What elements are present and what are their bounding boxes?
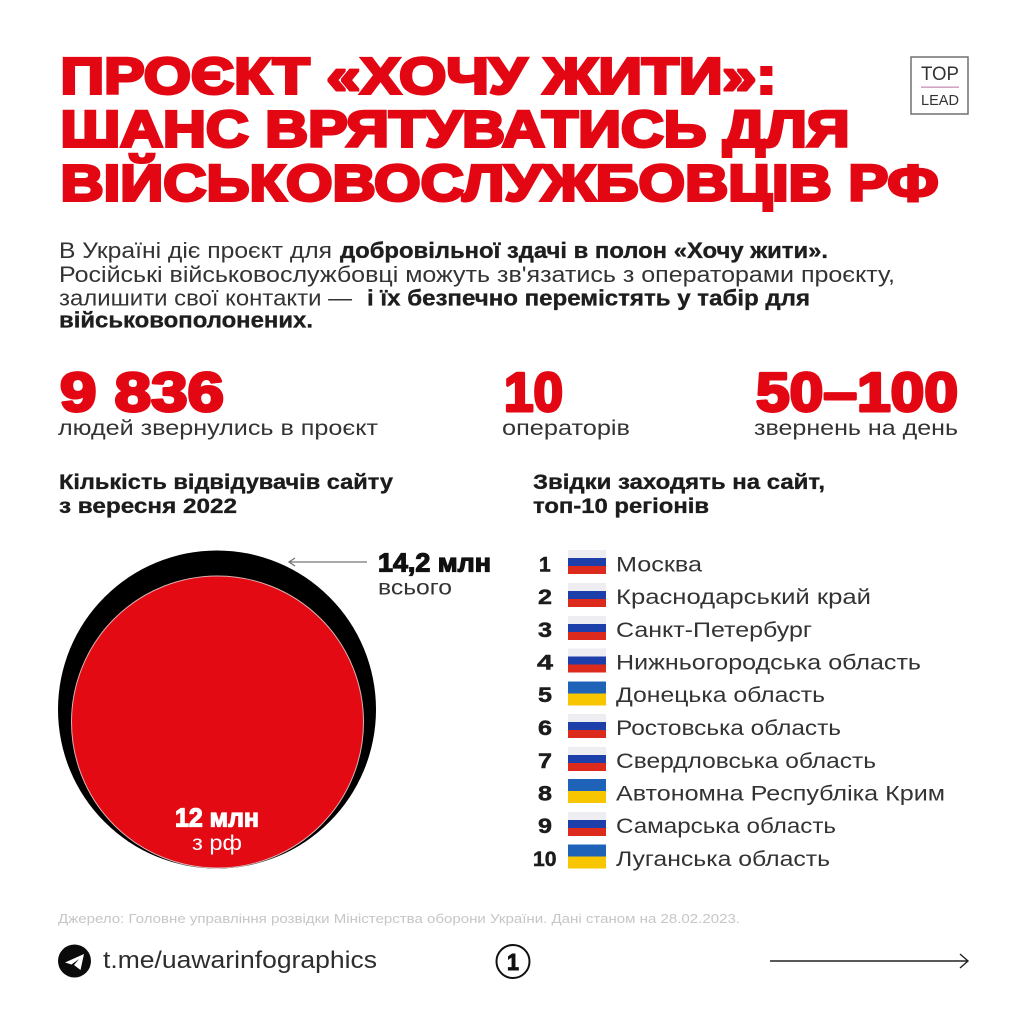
list: top 10 regions: 3 (538, 619, 552, 642)
chart: visitors circles: з рф (192, 832, 242, 855)
page number (496, 945, 530, 978)
logo: Top Lead: TOP (921, 64, 959, 85)
list: top 10 regions: Санкт-Петербург (616, 618, 812, 642)
stat: requests per day: звернень на день (754, 416, 958, 440)
arrow: next page (770, 954, 968, 968)
label: total visitors (378, 548, 491, 600)
title (60, 48, 938, 212)
list: top 10 regions: 8 (538, 782, 552, 806)
list: top 10 regions: 6 (538, 717, 552, 740)
list: top 10 regions: Свердловська область (616, 749, 876, 773)
list: top 10 regions: 5 (538, 684, 552, 707)
stat: people who applied: людей звернулись в проєкт (58, 416, 378, 440)
list: top 10 regions: 9 (538, 815, 552, 838)
stat: people who applied: 9 836 (60, 361, 224, 423)
list: top 10 regions: Луганська область (616, 847, 830, 871)
heading: site visitors: Кількість відвідувачів сайту (59, 470, 393, 494)
title: ПРОЄКТ «ХОЧУ ЖИТИ»: (60, 48, 777, 104)
list: top 10 regions: 2 (538, 586, 552, 609)
intro text: В Україні діє проєкт для (59, 238, 332, 263)
intro text: добровільної здачі в полон «Хочу жити». (340, 238, 828, 263)
intro text: Російські військовослужбовці можуть зв'язатись з операторами проєкту, (59, 262, 895, 287)
telegram link: t.me/uawarinfographics (103, 947, 377, 974)
stat: requests per day: 50–100 (756, 361, 958, 423)
heading: site visitors: з вересня 2022 (59, 494, 237, 518)
logo: Top Lead: LEAD (921, 93, 959, 109)
icon: telegram (58, 944, 91, 978)
stat: operators: операторів (502, 416, 630, 440)
list: top 10 regions: Донецька область (616, 683, 825, 707)
intro text: військовополонених. (59, 308, 313, 332)
heading: top regions: топ-10 регіонів (533, 494, 709, 518)
chart: visitors circles (58, 550, 376, 868)
stat: operators (502, 361, 630, 440)
list: top 10 regions: 10 (533, 848, 556, 871)
label: total visitors: 14,2 млн (378, 548, 491, 578)
list: top 10 regions: Краснодарський край (616, 585, 871, 609)
stat: operators: 10 (504, 361, 563, 423)
intro text (59, 238, 895, 332)
list: top 10 regions: Нижньогородська область (616, 650, 921, 674)
logo: Top Lead (911, 57, 968, 114)
list: top 10 regions: Самарська область (616, 814, 836, 838)
heading: site visitors (59, 470, 393, 518)
title: ВІЙСЬКОВОСЛУЖБОВЦІВ РФ (60, 154, 938, 212)
heading: top regions (533, 470, 825, 518)
list: top 10 regions: Автономна Республіка Крим (616, 782, 945, 806)
intro text: і їх безпечно перемістять у табір для (367, 286, 810, 310)
list: top 10 regions: Ростовська область (616, 716, 841, 740)
list: top 10 regions: 1 (539, 554, 551, 576)
list: top 10 regions: Москва (616, 552, 702, 576)
stat: people who applied (58, 361, 378, 440)
source note: Джерело: Головне управління розвідки Міністерства оборони України. Дані станом на 28.02.2023. (58, 911, 740, 926)
arrow: total pointer (289, 558, 367, 566)
title: ШАНС ВРЯТУВАТИСЬ ДЛЯ (60, 101, 849, 158)
list: top 10 regions (533, 550, 945, 871)
page number: 1 (507, 949, 519, 975)
heading: top regions: Звідки заходять на сайт, (533, 470, 825, 494)
list: top 10 regions: 7 (538, 750, 552, 773)
list: top 10 regions: 4 (537, 652, 553, 674)
chart: visitors circles: 12 млн (175, 802, 259, 832)
label: total visitors: всього (378, 576, 452, 600)
intro text: залишити свої контакти — (59, 286, 352, 310)
